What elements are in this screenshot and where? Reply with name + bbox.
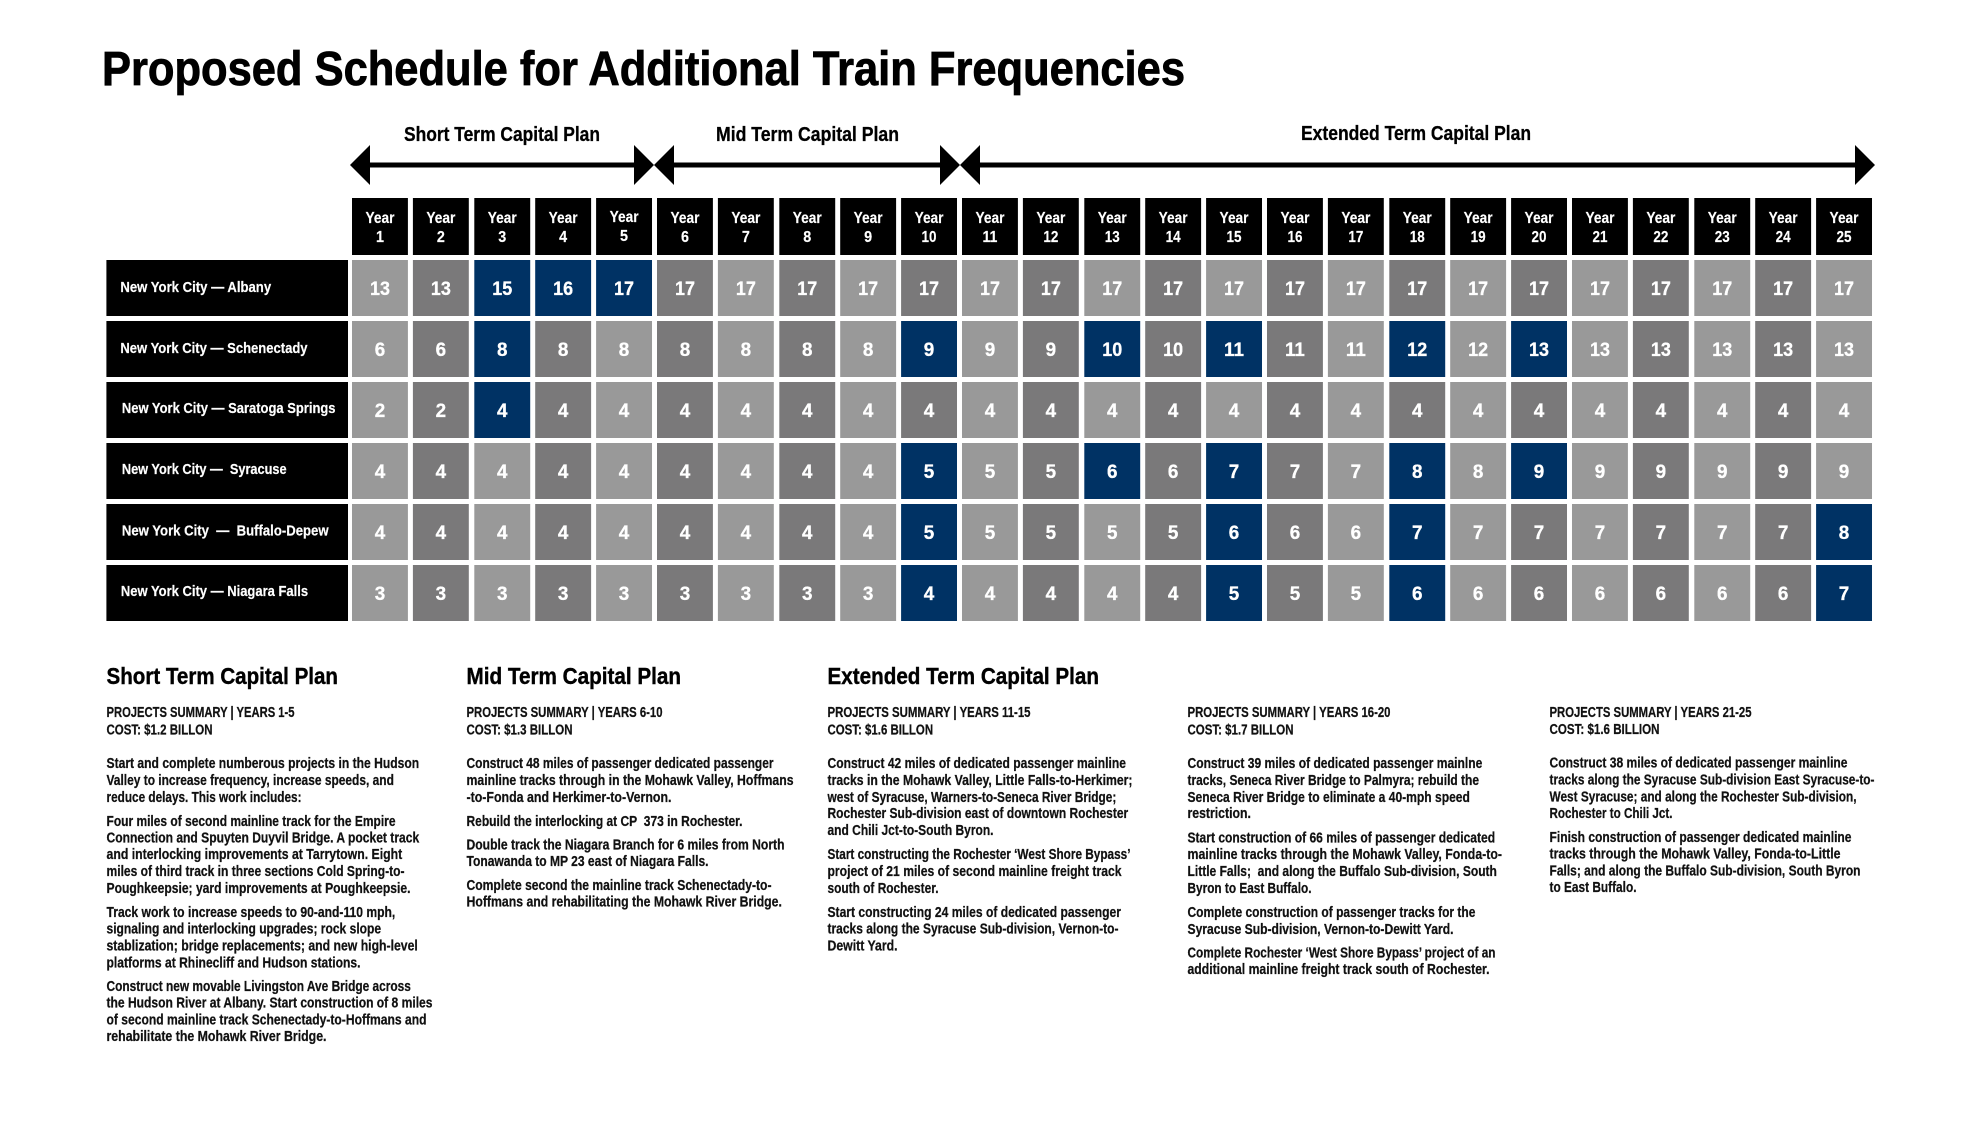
row: New York City to Saratoga Springs: 4 [741,400,751,422]
year header row: 6 [681,229,689,246]
row: New York City to Niagara Falls: 4 [924,583,934,605]
row: New York City to Albany: 17 [919,278,939,300]
year header row: 9 [864,229,872,246]
row: New York City to Buffalo-Depew: 4 [497,522,508,544]
text block: extended term plan years 11-15: tracks along the Syracuse Sub-division, Vernon-to- [828,922,1119,938]
row: New York City to Buffalo-Depew: 7 [1412,522,1422,544]
text block: extended term plan years 21-25 [1550,705,1875,896]
arrow: extended term [960,145,1875,185]
year header row: Year [1464,210,1493,227]
year header row: 10 [922,229,937,246]
text block: extended term plan years 11-15: tracks in the Mohawk Valley, Little Falls-to-Herkimer; [828,773,1132,789]
row: New York City to Niagara Falls: 5 [1229,583,1239,605]
row: New York City to Buffalo-Depew: 4 [558,522,569,544]
row: New York City to Saratoga Springs: 4 [1778,400,1789,422]
row: New York City to Syracuse: 8 [1473,461,1484,483]
row: New York City to Saratoga Springs: 4 [1534,400,1544,422]
row: New York City to Saratoga Springs: 4 [924,400,934,422]
row: New York City to Saratoga Springs: 4 [802,400,813,422]
row: New York City to Syracuse: 4 [802,461,813,483]
text block: extended term plan years 21-25: tracks along the Syracuse Sub-division East Syracuse-to- [1550,772,1875,788]
row: New York City to Schenectady: 8 [558,339,569,361]
row: New York City to Albany: 17 [1041,278,1061,300]
row: New York City to Buffalo-Depew: 4 [680,522,690,544]
row: New York City to Albany: 17 [1346,278,1366,300]
text block: extended term plan years 21-25: Falls; and along the Buffalo Sub-division, South Byron [1550,864,1860,880]
row: New York City to Buffalo-Depew: 5 [1046,522,1056,544]
row: New York City to Albany: 17 [1285,278,1305,300]
row: New York City to Buffalo-Depew: 5 [1107,522,1118,544]
row: New York City to Schenectady: 8 [680,339,690,361]
row: New York City to Schenectady: 12 [1468,339,1488,361]
row: New York City to Syracuse: 8 [1412,461,1423,483]
text block: short term plan years 1-5: PROJECTS SUMMARY | YEARS 1-5 [106,705,294,721]
text block: extended term plan years 11-15: Rochester Sub-division east of downtown Rochester [828,806,1128,822]
row: New York City to Buffalo-Depew: 5 [985,522,995,544]
arrow: short term [350,145,654,185]
row: New York City to Syracuse: 4 [619,461,629,483]
row: New York City to Saratoga Springs: 4 [1656,400,1666,422]
row: New York City to Albany: 17 [1529,278,1549,300]
row: New York City to Syracuse: 6 [1107,461,1118,483]
row: New York City to Niagara Falls: 6 [1534,583,1544,605]
row: New York City to Saratoga Springs: 2 [436,400,446,422]
row: New York City to Saratoga Springs: 4 [1839,400,1849,422]
row: New York City to Saratoga Springs: 4 [985,400,995,422]
year header row: Year [1036,210,1065,227]
row: New York City to Syracuse: 7 [1351,461,1361,483]
year header row: Year [975,210,1004,227]
text block: extended term plan years 16-20 [1188,705,1502,978]
row: New York City to Syracuse: 9 [1656,461,1666,483]
row: New York City to Saratoga Springs: 4 [1351,400,1361,422]
text block: short term plan years 1-5: miles of third track in three sections Cold Spring-to- [106,864,405,880]
row: New York City to Schenectady: 9 [985,339,995,361]
text block: extended term plan years 16-20: Complete construction of passenger tracks for the [1188,905,1475,921]
row: New York City to Niagara Falls: 3 [680,583,690,605]
row: New York City to Schenectady: 13 [1834,339,1854,361]
row: New York City to Schenectady: 12 [1407,339,1427,361]
row: New York City to Buffalo-Depew: 7 [1656,522,1666,544]
year header row: Year [1585,210,1614,227]
row: New York City to Saratoga Springs [106,382,1872,438]
row: New York City to Saratoga Springs: 4 [619,400,629,422]
text block: extended term plan years 16-20: Byron to East Buffalo. [1188,881,1312,897]
title: Proposed Schedule for Additional Train Frequencies [102,43,1185,96]
row: New York City to Schenectady: 13 [1529,339,1549,361]
row: New York City to Niagara Falls: 4 [1168,583,1179,605]
text block: short term plan years 1-5: Connection and Spuyten Duyvil Bridge. A pocket track [106,830,420,846]
row: New York City to Buffalo-Depew: 4 [802,522,813,544]
text block: extended term plan years 21-25: Finish construction of passenger dedicated mainline [1550,830,1852,846]
row: New York City to Syracuse: 5 [985,461,995,483]
text block: extended term plan years 21-25: tracks through the Mohawk Valley, Fonda-to-Little [1550,846,1840,862]
year header row: 7 [742,229,750,246]
row: New York City to Albany: 17 [1651,278,1671,300]
year header row: 15 [1227,229,1242,246]
text block: extended term plan years 21-25: West Syracuse; and along the Rochester Sub-division, [1550,790,1856,806]
row: New York City to Buffalo-Depew: 4 [375,522,385,544]
year header row: Year [1646,210,1675,227]
text block: short term plan years 1-5 [106,663,432,1045]
heading: short term plan: Short Term Capital Plan [404,124,600,146]
heading: mid term plan: Mid Term Capital Plan [716,124,899,146]
row: New York City to Niagara Falls: 3 [375,583,385,605]
text block: short term plan years 1-5: COST: $1.2 BILLON [106,722,212,738]
text block: extended term plan years 11-15: PROJECTS SUMMARY | YEARS 11-15 [828,705,1030,721]
row: New York City to Syracuse: 5 [1046,461,1056,483]
row: New York City to Syracuse: 9 [1778,461,1789,483]
row: New York City to Buffalo-Depew: 8 [1839,522,1849,544]
row: New York City to Albany [106,260,1872,316]
text block: mid term plan years 6-10: Hoffmans and rehabilitating the Mohawk River Bridge. [466,894,782,910]
row: New York City to Niagara Falls: 6 [1656,583,1666,605]
row: New York City to Buffalo-Depew: 4 [619,522,629,544]
subheading: short term: Short Term Capital Plan [106,663,338,689]
year header row: 18 [1410,229,1425,246]
year header row: 13 [1105,229,1120,246]
text block: extended term plan years 16-20: PROJECTS SUMMARY | YEARS 16-20 [1188,705,1390,721]
row: New York City to Syracuse: 5 [924,461,934,483]
text block: mid term plan years 6-10 [466,663,794,910]
year header row: 4 [559,229,567,246]
year header row: Year [1220,210,1249,227]
year header row: Year [1708,210,1737,227]
row: New York City to Albany: New York City — Albany [120,279,272,296]
row: New York City to Schenectady: 8 [497,339,508,361]
year header row: Year [1403,210,1432,227]
row: New York City to Schenectady: 13 [1651,339,1671,361]
row: New York City to Albany: 17 [614,278,634,300]
text block: short term plan years 1-5: signaling and interlocking upgrades; rock slope [106,922,381,938]
row: New York City to Niagara Falls: 6 [1778,583,1789,605]
text block: extended term plan years 16-20: Complete Rochester ‘West Shore Bypass’ project of an [1188,946,1496,962]
year header row: 24 [1776,229,1791,246]
row: New York City to Albany: 17 [1102,278,1122,300]
text block: short term plan years 1-5: Construct new movable Livingston Ave Bridge across [106,979,411,995]
row: New York City to Schenectady: 13 [1590,339,1610,361]
row: New York City to Schenectady: 8 [802,339,813,361]
arrow: mid term [654,145,960,185]
year header row: Year [426,210,455,227]
row: New York City to Albany: 17 [858,278,878,300]
year header row: 12 [1043,229,1058,246]
row: New York City to Niagara Falls: 5 [1290,583,1300,605]
text block: extended term plan years 16-20: mainline tracks through the Mohawk Valley, Fonda-to- [1188,847,1502,863]
text block: extended term plan years 11-15: south of Rochester. [828,881,938,897]
row: New York City to Albany: 17 [1712,278,1732,300]
year header row: Year [915,210,944,227]
text block: short term plan years 1-5: Track work to increase speeds to 90-and-110 mph, [106,905,395,921]
row: New York City to Syracuse: 4 [558,461,569,483]
row: New York City to Niagara Falls: 3 [802,583,813,605]
row: New York City to Syracuse: 7 [1229,461,1239,483]
row: New York City to Albany: 17 [980,278,1000,300]
year header row: 20 [1532,229,1547,246]
year header row: 23 [1715,229,1730,246]
row: New York City to Niagara Falls: 4 [985,583,995,605]
row: New York City to Syracuse: 7 [1290,461,1300,483]
text block: short term plan years 1-5: platforms at Rhinecliff and Hudson stations. [106,956,360,972]
row: New York City to Niagara Falls: 3 [863,583,874,605]
row: New York City to Saratoga Springs: New York City — Saratoga Springs [122,400,336,417]
text block: short term plan years 1-5: reduce delays. This work includes: [106,790,302,806]
text block: extended term plan years 21-25: COST: $1.6 BILLION [1550,722,1660,738]
text block: extended term plan years 16-20: Construct 39 miles of dedicated passenger mainlne [1188,756,1482,772]
row: New York City to Albany: 17 [797,278,817,300]
row: New York City to Albany: 13 [370,278,390,300]
row: New York City to Saratoga Springs: 4 [1046,400,1056,422]
row: New York City to Saratoga Springs: 4 [558,400,569,422]
year header row: Year [488,210,517,227]
year header row: Year [793,210,822,227]
row: New York City to Albany: 17 [1773,278,1793,300]
row: New York City to Schenectady: 6 [375,339,385,361]
text block: mid term plan years 6-10: COST: $1.3 BILLON [466,722,572,738]
text block: short term plan years 1-5: and interlocking improvements at Tarrytown. Eight [106,847,402,863]
year header row: Year [1830,210,1859,227]
row: New York City to Saratoga Springs: 4 [863,400,874,422]
row: New York City to Saratoga Springs: 4 [1473,400,1484,422]
row: New York City to Niagara Falls [106,565,1872,621]
row: New York City to Schenectady: New York City — Schenectady [120,340,308,357]
year header row: Year [1525,210,1554,227]
row: New York City to Buffalo-Depew: 7 [1534,522,1544,544]
year header row: 16 [1287,229,1303,246]
year header row: 2 [437,229,445,246]
text block: mid term plan years 6-10: mainline tracks through in the Mohawk Valley, Hoffmans [466,773,794,789]
year header row: Year [670,210,699,227]
row: New York City to Syracuse: 9 [1717,461,1728,483]
row: New York City to Niagara Falls: 6 [1595,583,1605,605]
year header row: 17 [1348,229,1363,246]
row: New York City to Niagara Falls: 3 [497,583,508,605]
row: New York City to Buffalo-Depew: 4 [863,522,874,544]
row: New York City to Schenectady: 9 [1046,339,1056,361]
row: New York City to Niagara Falls: 3 [558,583,569,605]
row: New York City to Schenectady: 11 [1285,339,1305,361]
year header row: 19 [1471,229,1486,246]
year header row: 21 [1592,229,1608,246]
row: New York City to Buffalo-Depew: New York City — Buffalo-Depew [122,522,329,540]
row: New York City to Schenectady: 8 [619,339,629,361]
row: New York City to Saratoga Springs: 4 [1290,400,1300,422]
row: New York City to Albany: 17 [1407,278,1427,300]
row: New York City to Niagara Falls: 6 [1473,583,1484,605]
text block: extended term plan years 16-20: COST: $1.7 BILLON [1188,722,1294,738]
row: New York City to Saratoga Springs: 4 [1107,400,1118,422]
row: New York City to Albany: 16 [553,278,573,300]
row: New York City to Niagara Falls: 4 [1046,583,1056,605]
text block: mid term plan years 6-10: Complete second the mainline track Schenectady-to- [466,878,772,894]
text block: extended term plan years 16-20: tracks, Seneca River Bridge to Palmyra; rebuild the [1188,773,1479,789]
row: New York City to Buffalo-Depew: 4 [436,522,446,544]
row: New York City to Schenectady [106,321,1872,377]
row: New York City to Syracuse: 4 [741,461,751,483]
row: New York City to Buffalo-Depew: 7 [1717,522,1727,544]
text block: extended term plan years 11-15: and Chili Jct-to-South Byron. [828,823,994,839]
row: New York City to Saratoga Springs: 4 [1229,400,1239,422]
row: New York City to Niagara Falls: 4 [1107,583,1118,605]
text block: mid term plan years 6-10: Rebuild the interlocking at CP 373 in Rochester. [466,814,742,830]
text block: extended term plan years 21-25: PROJECTS SUMMARY | YEARS 21-25 [1550,705,1752,721]
row: New York City to Schenectady: 10 [1163,339,1183,361]
row: New York City to Schenectady: 9 [924,339,934,361]
text block: extended term plan years 11-15: Dewitt Yard. [828,938,898,954]
year header row: Year [549,210,578,227]
text block: mid term plan years 6-10: PROJECTS SUMMARY | YEARS 6-10 [466,705,662,721]
row: New York City to Schenectady: 8 [863,339,874,361]
text block: extended term plan years 16-20: additional mainline freight track south of Rochester. [1188,962,1490,978]
row: New York City to Saratoga Springs: 4 [1412,400,1423,422]
year header row: Year [365,210,394,227]
row: New York City to Albany: 17 [1590,278,1610,300]
row: New York City to Niagara Falls: 6 [1717,583,1728,605]
row: New York City to Albany: 17 [675,278,695,300]
row: New York City to Schenectady: 13 [1712,339,1732,361]
text block: mid term plan years 6-10: Tonawanda to MP 23 east of Niagara Falls. [466,854,708,870]
text block: extended term plan years 11-15: Construct 42 miles of dedicated passenger mainline [828,756,1126,772]
row: New York City to Schenectady: 11 [1346,339,1366,361]
row: New York City to Niagara Falls: 3 [619,583,629,605]
row: New York City to Syracuse: 4 [863,461,874,483]
year header row: Year [854,210,883,227]
year header row: Year [1098,210,1127,227]
plan timeline arrows [350,123,1875,185]
row: New York City to Schenectady: 13 [1773,339,1793,361]
year header row: Year [1159,210,1188,227]
year header row: 8 [803,229,811,246]
text block: short term plan years 1-5: rehabilitate the Mohawk River Bridge. [106,1029,326,1045]
row: New York City to Buffalo-Depew: 5 [924,522,934,544]
text block: extended term plan years 11-15 [827,663,1132,954]
text block: extended term plan years 11-15: project of 21 miles of second mainline freight track [828,864,1122,880]
row: New York City to Albany: 13 [431,278,451,300]
text block: extended term plan years 11-15: Start constructing 24 miles of dedicated passenger [828,905,1121,921]
year header row: 14 [1166,229,1181,246]
year header row: Year [731,210,760,227]
row: New York City to Albany: 15 [492,278,512,300]
row: New York City to Syracuse: 4 [436,461,446,483]
row: New York City to Niagara Falls: 6 [1412,583,1423,605]
year header row: Year [610,209,639,226]
subheading: extended term: Extended Term Capital Plan [828,663,1099,689]
row: New York City to Saratoga Springs: 2 [375,400,385,422]
row: New York City to Buffalo-Depew: 7 [1778,522,1788,544]
row: New York City to Syracuse: 4 [375,461,385,483]
year header row: 3 [498,229,506,246]
row: New York City to Buffalo-Depew: 7 [1595,522,1605,544]
text block: extended term plan years 11-15: west of Syracuse, Warners-to-Seneca River Bridge; [827,790,1116,806]
row: New York City to Buffalo-Depew [106,504,1872,560]
row: New York City to Syracuse: 9 [1595,461,1605,483]
row: New York City to Schenectady: 8 [741,339,751,361]
year header row: 11 [982,229,998,246]
text block: extended term plan years 21-25: Rochester to Chili Jct. [1550,806,1672,822]
year header row: 5 [620,228,628,245]
year header row: Year [1769,210,1798,227]
text block: mid term plan years 6-10: Construct 48 miles of passenger dedicated passenger [466,756,774,772]
row: New York City to Buffalo-Depew: 6 [1351,522,1361,544]
subheading: mid term: Mid Term Capital Plan [466,663,681,689]
text block: mid term plan years 6-10: Double track the Niagara Branch for 6 miles from North [466,838,784,854]
text block: short term plan years 1-5: Start and complete numberous projects in the Hudson [106,756,419,772]
row: New York City to Syracuse: 4 [680,461,690,483]
row: New York City to Schenectady: 11 [1224,339,1244,361]
year header row: Year [1280,210,1309,227]
row: New York City to Buffalo-Depew: 6 [1229,522,1239,544]
text block: short term plan years 1-5: of second mainline track Schenectady-to-Hoffmans and [106,1012,426,1028]
row: New York City to Syracuse: 9 [1839,461,1849,483]
text block: extended term plan years 16-20: Seneca River Bridge to eliminate a 40-mph speed [1188,790,1470,806]
year header row: 1 [376,229,384,246]
year header row [352,198,1872,255]
row: New York City to Niagara Falls: 5 [1351,583,1361,605]
row: New York City to Saratoga Springs: 4 [497,400,508,422]
row: New York City to Buffalo-Depew: 6 [1290,522,1300,544]
row: New York City to Schenectady: 10 [1102,339,1122,361]
year header row: 22 [1653,229,1668,246]
row: New York City to Buffalo-Depew: 4 [741,522,751,544]
text block: extended term plan years 16-20: restriction. [1188,806,1251,822]
year header row: 25 [1837,229,1852,246]
row: New York City to Syracuse: 6 [1168,461,1179,483]
year header row: Year [1341,210,1370,227]
row: New York City to Buffalo-Depew: 5 [1168,522,1179,544]
row: New York City to Albany: 17 [1468,278,1488,300]
row: New York City to Niagara Falls: 3 [741,583,751,605]
row: New York City to Saratoga Springs: 4 [1595,400,1605,422]
row: New York City to Buffalo-Depew: 7 [1473,522,1483,544]
row: New York City to Saratoga Springs: 4 [1717,400,1728,422]
text block: extended term plan years 11-15: COST: $1.6 BILLON [828,722,933,738]
row: New York City to Albany: 17 [1224,278,1244,300]
row: New York City to Syracuse [106,443,1872,499]
heading: extended term plan: Extended Term Capital Plan [1301,123,1531,145]
row: New York City to Niagara Falls: 7 [1839,583,1849,605]
text block: short term plan years 1-5: Poughkeepsie; yard improvements at Poughkeepsie. [106,881,410,897]
text block: extended term plan years 16-20: Syracuse Sub-division, Vernon-to-Dewitt Yard. [1188,922,1454,938]
row: New York City to Niagara Falls: 3 [436,583,446,605]
text block: extended term plan years 16-20: Little Falls; and along the Buffalo Sub-division, South [1188,864,1497,880]
row: New York City to Albany: 17 [1834,278,1854,300]
text block: short term plan years 1-5: stablization; bridge replacements; and new high-level [106,938,418,954]
text block: short term plan years 1-5: the Hudson River at Albany. Start construction of 8 miles [106,996,432,1012]
row: New York City to Albany: 17 [736,278,756,300]
row: New York City to Albany: 17 [1163,278,1183,300]
text block: extended term plan years 11-15: Start constructing the Rochester ‘West Shore Bypass’ [828,847,1130,863]
text block: extended term plan years 21-25: to East Buffalo. [1550,880,1636,896]
row: New York City to Saratoga Springs: 4 [1168,400,1179,422]
text block: short term plan years 1-5: Four miles of second mainline track for the Empire [106,814,396,830]
row: New York City to Syracuse: 9 [1534,461,1544,483]
row: New York City to Niagara Falls: New York City — Niagara Falls [121,583,308,600]
text block: extended term plan years 21-25: Construct 38 miles of dedicated passenger mainline [1550,756,1848,772]
row: New York City to Schenectady: 6 [436,339,446,361]
text block: mid term plan years 6-10: -to-Fonda and Herkimer-to-Vernon. [466,790,672,806]
row: New York City to Syracuse: New York City — Syracuse [122,461,287,478]
row: New York City to Syracuse: 4 [497,461,508,483]
text block: extended term plan years 16-20: Start construction of 66 miles of passenger dedicated [1188,830,1495,846]
text block: short term plan years 1-5: Valley to increase frequency, increase speeds, and [106,773,394,789]
row: New York City to Saratoga Springs: 4 [680,400,690,422]
